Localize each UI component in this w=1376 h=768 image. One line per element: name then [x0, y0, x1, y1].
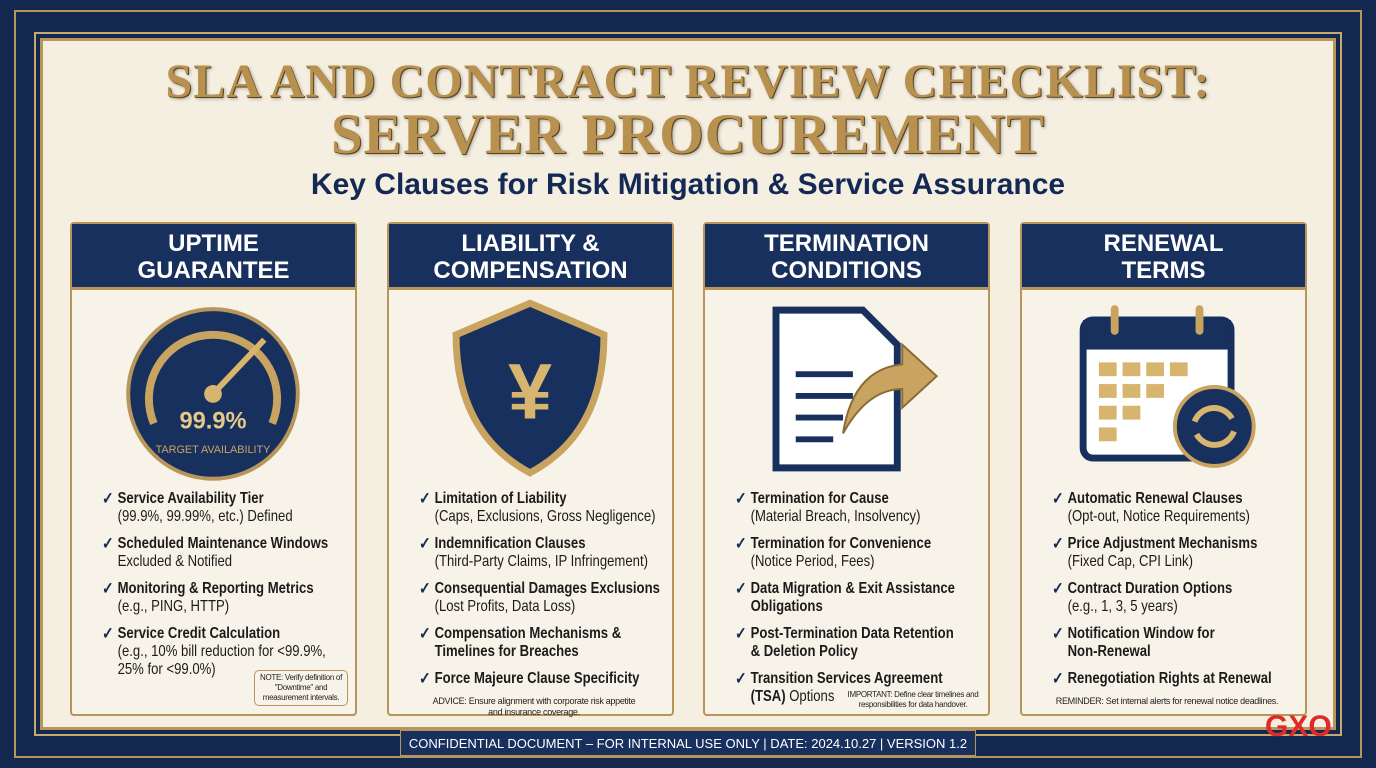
panel: termination: Termination for Convenience [751, 535, 931, 552]
panel: uptime: Monitoring & Reporting Metrics [118, 580, 314, 597]
panel: liability: Indemnification Clauses [435, 535, 585, 552]
panel: liability: Timelines for Breaches [435, 643, 579, 660]
panel: termination: Termination for Cause [751, 490, 889, 507]
icon: document arrow [772, 306, 938, 472]
panel: termination: Obligations [751, 598, 823, 615]
icon: calendar [1080, 305, 1256, 468]
panel: renewal: TERMS [1122, 257, 1206, 284]
panel: renewal: Contract Duration Options [1068, 580, 1232, 597]
title: SLA AND CONTRACT REVIEW CHECKLIST: [166, 55, 1210, 108]
panel: termination [703, 222, 990, 716]
panel: liability: (Lost Profits, Data Loss) [435, 598, 575, 615]
panel: renewal [1020, 222, 1307, 716]
icon: gauge: TARGET AVAILABILITY [156, 444, 270, 456]
panel: termination: Transition Services Agreement [751, 670, 943, 687]
panel: termination: Data Migration & Exit Assistance [751, 580, 955, 597]
panel: renewal: Automatic Renewal Clauses [1068, 490, 1243, 507]
note: REMINDER: Set internal alerts for renewal notice deadlines. [1056, 696, 1278, 706]
panel: renewal: Renegotiation Rights at Renewal [1068, 670, 1272, 687]
panel: uptime: (e.g., 10% bill reduction for <99.9%, [118, 643, 326, 660]
panel: uptime: 25% for <99.0%) [118, 661, 216, 678]
panel: liability: Limitation of Liability [435, 490, 567, 507]
panel: liability: LIABILITY & [461, 230, 600, 257]
panel: uptime: Scheduled Maintenance Windows [118, 535, 328, 552]
logo: GXO [1265, 710, 1332, 743]
footer: CONFIDENTIAL DOCUMENT – FOR INTERNAL USE ONLY | DATE: 2024.10.27 | VERSION 1.2 [409, 736, 967, 751]
panel: renewal: (Fixed Cap, CPI Link) [1068, 553, 1193, 570]
panel: termination: & Deletion Policy [751, 643, 858, 660]
panel: uptime: (e.g., PING, HTTP) [118, 598, 229, 615]
panel: renewal: RENEWAL [1104, 230, 1224, 257]
panel: liability: Compensation Mechanisms & [435, 625, 621, 642]
panel: liability: COMPENSATION [433, 257, 628, 284]
icon: shield: ¥ [508, 348, 552, 436]
note: ADVICE: Ensure alignment with corporate risk appetite and insurance coverage. [433, 696, 635, 717]
panel: uptime: Excluded & Notified [118, 553, 232, 570]
panel: liability [387, 222, 674, 716]
panel: termination: CONDITIONS [771, 257, 922, 284]
panel: renewal: Notification Window for [1068, 625, 1215, 642]
panel: liability: Force Majeure Clause Specificity [435, 670, 639, 687]
icon: gauge: 99.9% [179, 408, 247, 434]
panel: termination: Post-Termination Data Retention [751, 625, 954, 642]
title line 2: SERVER PROCUREMENT [331, 103, 1045, 166]
panel: uptime: UPTIME [168, 230, 259, 257]
footer [400, 730, 976, 756]
icon: shield [452, 300, 608, 477]
panel: liability: Consequential Damages Exclusions [435, 580, 660, 597]
panel: liability: (Third-Party Claims, IP Infringement) [435, 553, 648, 570]
panel: uptime: (99.9%, 99.99%, etc.) Defined [118, 508, 293, 525]
icon: gauge [126, 307, 300, 481]
panel: uptime: GUARANTEE [137, 257, 290, 284]
panel: termination: TERMINATION [764, 230, 929, 257]
panel: uptime: Service Availability Tier [118, 490, 264, 507]
panel: termination: (TSA) Options [751, 688, 834, 705]
panel: renewal: Non-Renewal [1068, 643, 1151, 660]
panel: termination: (Notice Period, Fees) [751, 553, 875, 570]
note: NOTE: Verify definition of "Downtime" and measurement intervals. [260, 673, 342, 702]
panel: renewal: (Opt-out, Notice Requirements) [1068, 508, 1250, 525]
note: IMPORTANT: Define clear timelines and responsibilities for data handover. [848, 690, 978, 709]
panel: renewal: Price Adjustment Mechanisms [1068, 535, 1257, 552]
panel: liability: (Caps, Exclusions, Gross Negligence) [435, 508, 656, 525]
panel: termination: (Material Breach, Insolvency) [751, 508, 920, 525]
panel: renewal: (e.g., 1, 3, 5 years) [1068, 598, 1178, 615]
panel: uptime [70, 222, 357, 716]
subtitle: Key Clauses for Risk Mitigation & Service Assurance [311, 168, 1065, 201]
panel: uptime: Service Credit Calculation [118, 625, 280, 642]
